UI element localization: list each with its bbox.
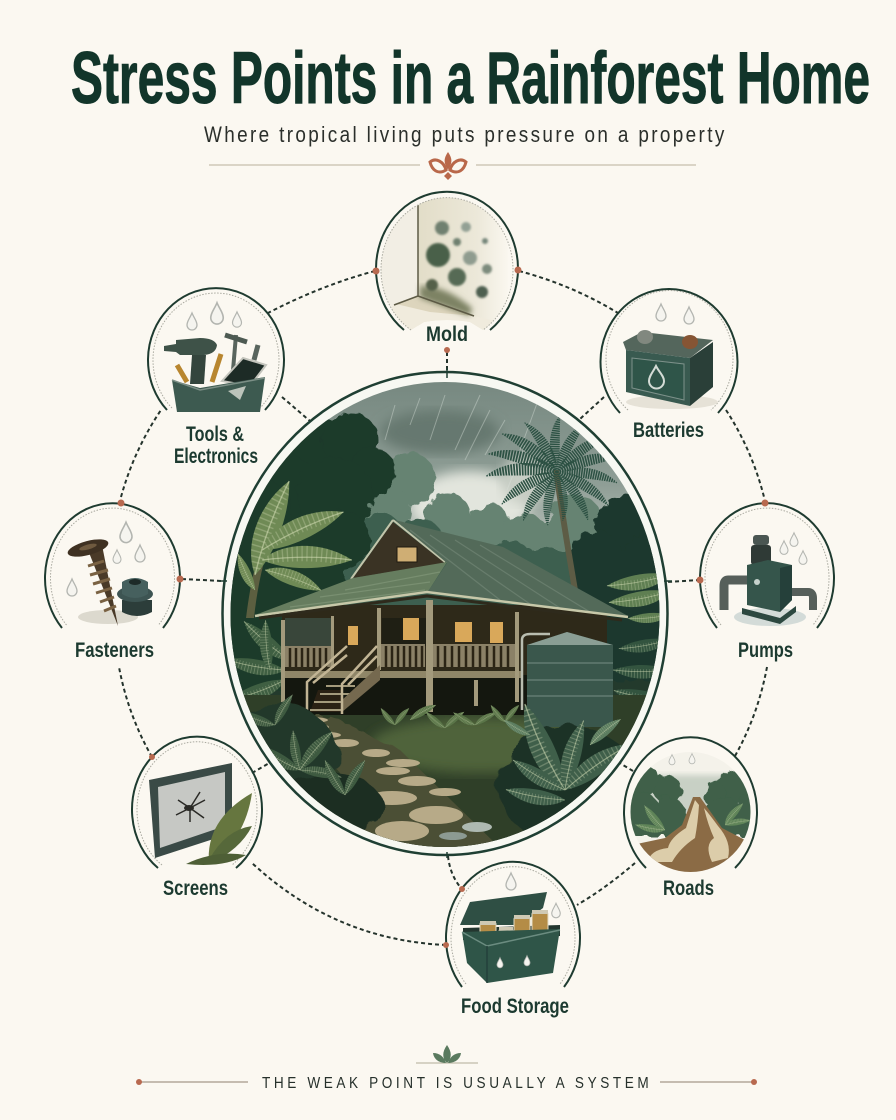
icon: rain drops — [656, 304, 694, 324]
scene — [222, 375, 676, 855]
panel: food storage — [443, 862, 580, 1018]
under-floor shadow — [285, 675, 527, 715]
walls — [282, 605, 607, 675]
connector: food storage to screens — [252, 863, 446, 945]
icon: rain drops — [187, 303, 242, 330]
inner dotted ring — [606, 291, 733, 410]
right dark tree — [570, 494, 660, 682]
label: Fasteners — [75, 639, 154, 662]
connector: mold to centre — [446, 352, 448, 375]
panel: tools and electronics — [148, 288, 284, 468]
connector node — [149, 754, 155, 760]
label: Batteries — [633, 419, 704, 442]
ring — [446, 862, 580, 987]
right banana plant — [606, 573, 660, 623]
ring — [132, 737, 262, 868]
icon: leaf — [186, 793, 252, 865]
mid forest — [343, 512, 571, 605]
panel: batteries — [600, 289, 737, 442]
railings — [285, 644, 517, 667]
label: Roads — [663, 877, 714, 900]
icon: open storage box with jars — [460, 892, 560, 983]
far misty forest — [364, 451, 599, 552]
footer leaf ornament — [416, 1045, 478, 1063]
front roof — [255, 562, 447, 615]
foreground left plants — [250, 694, 386, 830]
stone path — [314, 714, 493, 847]
panel: pumps — [696, 500, 834, 662]
label: Pumps — [738, 639, 793, 662]
label: Food Storage — [461, 995, 569, 1018]
label: Mold — [426, 323, 468, 346]
ring — [700, 503, 834, 628]
connector: fasteners to tools — [121, 410, 161, 497]
connector: pumps to roads — [735, 667, 767, 756]
panel: roads — [620, 737, 766, 900]
house — [255, 520, 628, 715]
footer tagline — [136, 1075, 757, 1092]
ground — [244, 695, 646, 847]
inner dotted ring — [451, 867, 575, 984]
foreground right plants — [494, 704, 623, 831]
inner dotted ring — [381, 198, 513, 330]
connector: mold to tools — [268, 271, 375, 313]
icon: rain drops — [669, 754, 695, 765]
inner dotted ring — [50, 508, 175, 625]
panel: fasteners — [45, 500, 184, 662]
connector: pumps to centre — [667, 580, 700, 582]
icon: rain drops — [67, 522, 145, 596]
left dark tree — [225, 412, 396, 690]
icon: rain drops — [506, 873, 560, 918]
icon: rain drops — [780, 533, 807, 564]
icon: rusty screw and nut — [66, 536, 153, 626]
panel: mold — [372, 192, 522, 353]
connector: screens to fasteners — [119, 667, 152, 757]
inner dotted ring — [137, 742, 257, 865]
ring — [45, 503, 180, 628]
label line two: Electronics — [174, 445, 258, 468]
icon: toolbox with drill — [164, 335, 266, 412]
connector: food storage to centre — [448, 856, 461, 888]
gable — [353, 522, 445, 578]
palm tree — [485, 414, 620, 590]
icon: muddy road scene — [630, 767, 750, 872]
connector nodes — [443, 886, 465, 948]
icon: car battery — [623, 330, 718, 409]
lower base fill — [225, 545, 665, 855]
left low plants — [234, 620, 281, 701]
stairs — [310, 690, 342, 712]
panel: screens — [132, 737, 262, 900]
ring ticks — [219, 368, 672, 858]
sky — [237, 382, 654, 558]
connector: batteries to centre — [580, 397, 604, 419]
connector: roads to food storage — [577, 863, 635, 905]
rain tank — [522, 632, 613, 727]
right roof — [395, 520, 628, 616]
connector: screens to centre — [252, 762, 271, 773]
icon: water pump — [724, 535, 813, 626]
inner dotted ring — [705, 508, 829, 625]
central illustration: rainforest home — [219, 368, 676, 858]
deck beam and posts — [281, 671, 521, 678]
connector: tools to centre — [282, 397, 310, 421]
label: Tools & — [186, 423, 244, 446]
ring — [148, 288, 284, 410]
lit windows — [348, 618, 503, 645]
connector: mold to batteries — [519, 271, 618, 313]
icon: moldy wall corner — [380, 195, 508, 330]
connector nodes — [696, 500, 768, 584]
header ornament — [209, 152, 696, 180]
icon: window screen with mosquito — [149, 763, 232, 858]
ring — [376, 192, 518, 330]
connector nodes — [118, 500, 184, 582]
screened porch — [285, 618, 331, 646]
outer ring — [222, 372, 668, 855]
ring — [600, 289, 737, 413]
ring — [624, 737, 757, 868]
eave — [255, 592, 628, 617]
footer tagline: THE WEAK POINT IS USUALLY A SYSTEM — [262, 1075, 649, 1092]
subtitle: Where tropical living puts pressure on a property — [204, 123, 725, 147]
connector nodes — [372, 266, 522, 353]
connector: roads to centre — [618, 762, 633, 771]
label: Screens — [163, 877, 228, 900]
inner dotted ring — [153, 293, 279, 408]
connector: batteries to pumps — [726, 410, 764, 497]
plants under house — [380, 704, 520, 728]
left banana plant — [232, 476, 352, 618]
connector: fasteners to centre — [182, 579, 222, 581]
